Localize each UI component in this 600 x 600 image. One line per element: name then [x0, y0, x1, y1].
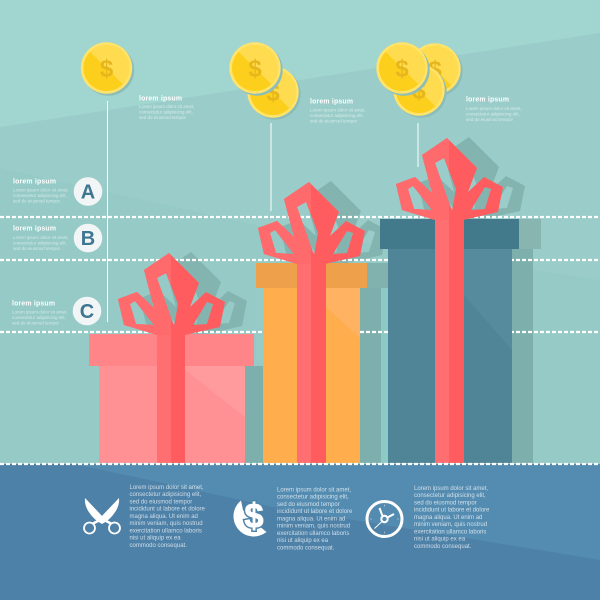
text block: coin 3: Lorem ipsum dolor sit amet,	[466, 106, 522, 111]
badge: C	[73, 297, 101, 325]
text block: scissors: minim veniam, quis nostrud	[130, 521, 203, 527]
gift: orange	[256, 182, 367, 463]
text block: clock: minim veniam, quis nostrud	[414, 522, 487, 528]
text block: A: Lorem ipsum dolor sit amet,	[13, 188, 69, 192]
text block: scissors	[130, 485, 206, 549]
icon: scissors	[84, 498, 120, 534]
text block: dollar: incididunt ut labore et dolore	[277, 509, 353, 515]
text block: clock: consectetur adipisicing elit,	[414, 493, 486, 499]
text block: coin 2: sed do eiusmod tempor	[310, 118, 358, 124]
text block: A: lorem ipsum	[13, 178, 56, 186]
text block: C: Lorem ipsum dolor sit amet,	[12, 310, 68, 314]
text block: coin 2: consectetur adipisicing elit,	[310, 113, 364, 118]
text block: dollar: consectetur adipisicing elit,	[277, 495, 349, 501]
badge: B	[74, 224, 102, 252]
text block: clock: commodo consequat.	[414, 544, 472, 550]
text block: scissors: nisi ut aliquip ex ea	[130, 536, 181, 542]
leader lines	[108, 101, 418, 322]
text block: A: sed do eiusmod tempor	[13, 198, 61, 204]
text block: C: lorem ipsum	[12, 300, 55, 308]
coins: triple: $	[395, 56, 409, 82]
text block: dollar	[277, 488, 353, 552]
coin: single: $	[100, 56, 114, 82]
text block: B: sed do eiusmod tempor	[13, 246, 61, 251]
text block: dollar: sed do eiusmod tempor	[277, 502, 340, 508]
coins: double: $	[266, 80, 280, 106]
text block: clock: incididunt ut labore et dolore	[414, 508, 490, 514]
bow: orange gift	[258, 182, 365, 264]
text block: dollar: minim veniam, quis nostrud	[277, 524, 350, 530]
text block: scissors: Lorem ipsum dolor sit amet,	[130, 485, 204, 491]
icon: dollar pie: $	[245, 498, 264, 536]
text block: B: Lorem ipsum dolor sit amet,	[13, 235, 69, 240]
text block: coin 1: consectetur adipisicing elit,	[139, 110, 193, 114]
coins: double	[229, 42, 301, 120]
gift: teal	[380, 138, 519, 463]
bottom panel	[0, 464, 600, 600]
bow shadows	[140, 137, 525, 334]
icon: dollar pie	[233, 498, 266, 537]
coins: double: $	[248, 56, 262, 82]
text block: scissors: consectetur adipisicing elit,	[130, 492, 202, 498]
text block: coin 3: lorem ipsum	[466, 96, 509, 104]
text block: clock: sed do eiusmod tempor	[414, 500, 477, 506]
text block: C: consectetur adipisicing elit,	[12, 315, 66, 320]
text block: dollar: commodo consequat.	[277, 546, 335, 552]
text block: dollar: nisi ut aliquip ex ea	[277, 538, 329, 544]
text block: coin 1: Lorem ipsum dolor sit amet,	[139, 104, 195, 109]
text block: clock	[414, 486, 490, 550]
text block: scissors: commodo consequat.	[130, 543, 187, 549]
text block: coin 2	[310, 98, 366, 124]
text block: coin 3: consectetur adipisicing elit,	[466, 112, 520, 116]
text block: coin 3	[466, 96, 522, 122]
text block: A	[13, 178, 69, 204]
dashed level lines	[0, 217, 600, 332]
coin: single	[81, 42, 134, 96]
text block: coin 1	[139, 96, 195, 120]
text block: scissors: incididunt ut labore et dolore	[130, 507, 206, 513]
text block: dollar: exercitation ullamco laboris	[277, 531, 349, 537]
text block: clock: nisi ut aliquip ex ea	[414, 537, 466, 543]
text block: coin 1: sed do eiusmod tempor	[139, 115, 187, 120]
coins: triple: $	[428, 56, 442, 84]
bottom dashed line	[0, 463, 600, 465]
text block: clock: exercitation ullamco laboris	[414, 530, 486, 536]
text block: scissors: sed do eiusmod tempor	[130, 500, 192, 506]
text block: A: consectetur adipisicing elit,	[13, 193, 67, 198]
text block: coin 2: lorem ipsum	[310, 98, 353, 106]
text block: C: sed do eiusmod tempor	[12, 320, 60, 326]
coins: triple	[376, 42, 463, 118]
text block: B	[13, 226, 69, 251]
text block: clock: magna aliqua. Ut enim ad	[414, 515, 482, 521]
text block: scissors: magna aliqua. Ut enim ad	[130, 514, 198, 520]
badge: A	[74, 177, 102, 206]
text block: dollar: magna aliqua. Ut enim ad	[277, 516, 345, 522]
badge: B: B	[81, 228, 95, 250]
text block: clock: Lorem ipsum dolor sit amet,	[414, 486, 488, 492]
bow: teal gift	[396, 138, 503, 220]
badge: A: A	[81, 182, 95, 204]
text block: coin 2: Lorem ipsum dolor sit amet,	[310, 108, 366, 112]
box shadows	[245, 219, 541, 463]
text block: B: consectetur adipisicing elit,	[13, 240, 67, 246]
text block: B: lorem ipsum	[13, 226, 56, 232]
icon: dollar pie: $	[245, 498, 264, 536]
gift: pink	[89, 253, 254, 463]
text block: coin 1: lorem ipsum	[139, 96, 182, 102]
bow: pink gift	[118, 253, 225, 335]
text block: scissors: exercitation ullamco laboris	[130, 528, 202, 534]
badge: C: C	[80, 301, 94, 323]
text block: dollar: Lorem ipsum dolor sit amet,	[277, 488, 351, 494]
text block: C	[12, 300, 68, 326]
text block: coin 3: sed do eiusmod tempor	[466, 117, 514, 122]
coins: triple: $	[412, 78, 426, 104]
icon: clock	[367, 502, 402, 536]
